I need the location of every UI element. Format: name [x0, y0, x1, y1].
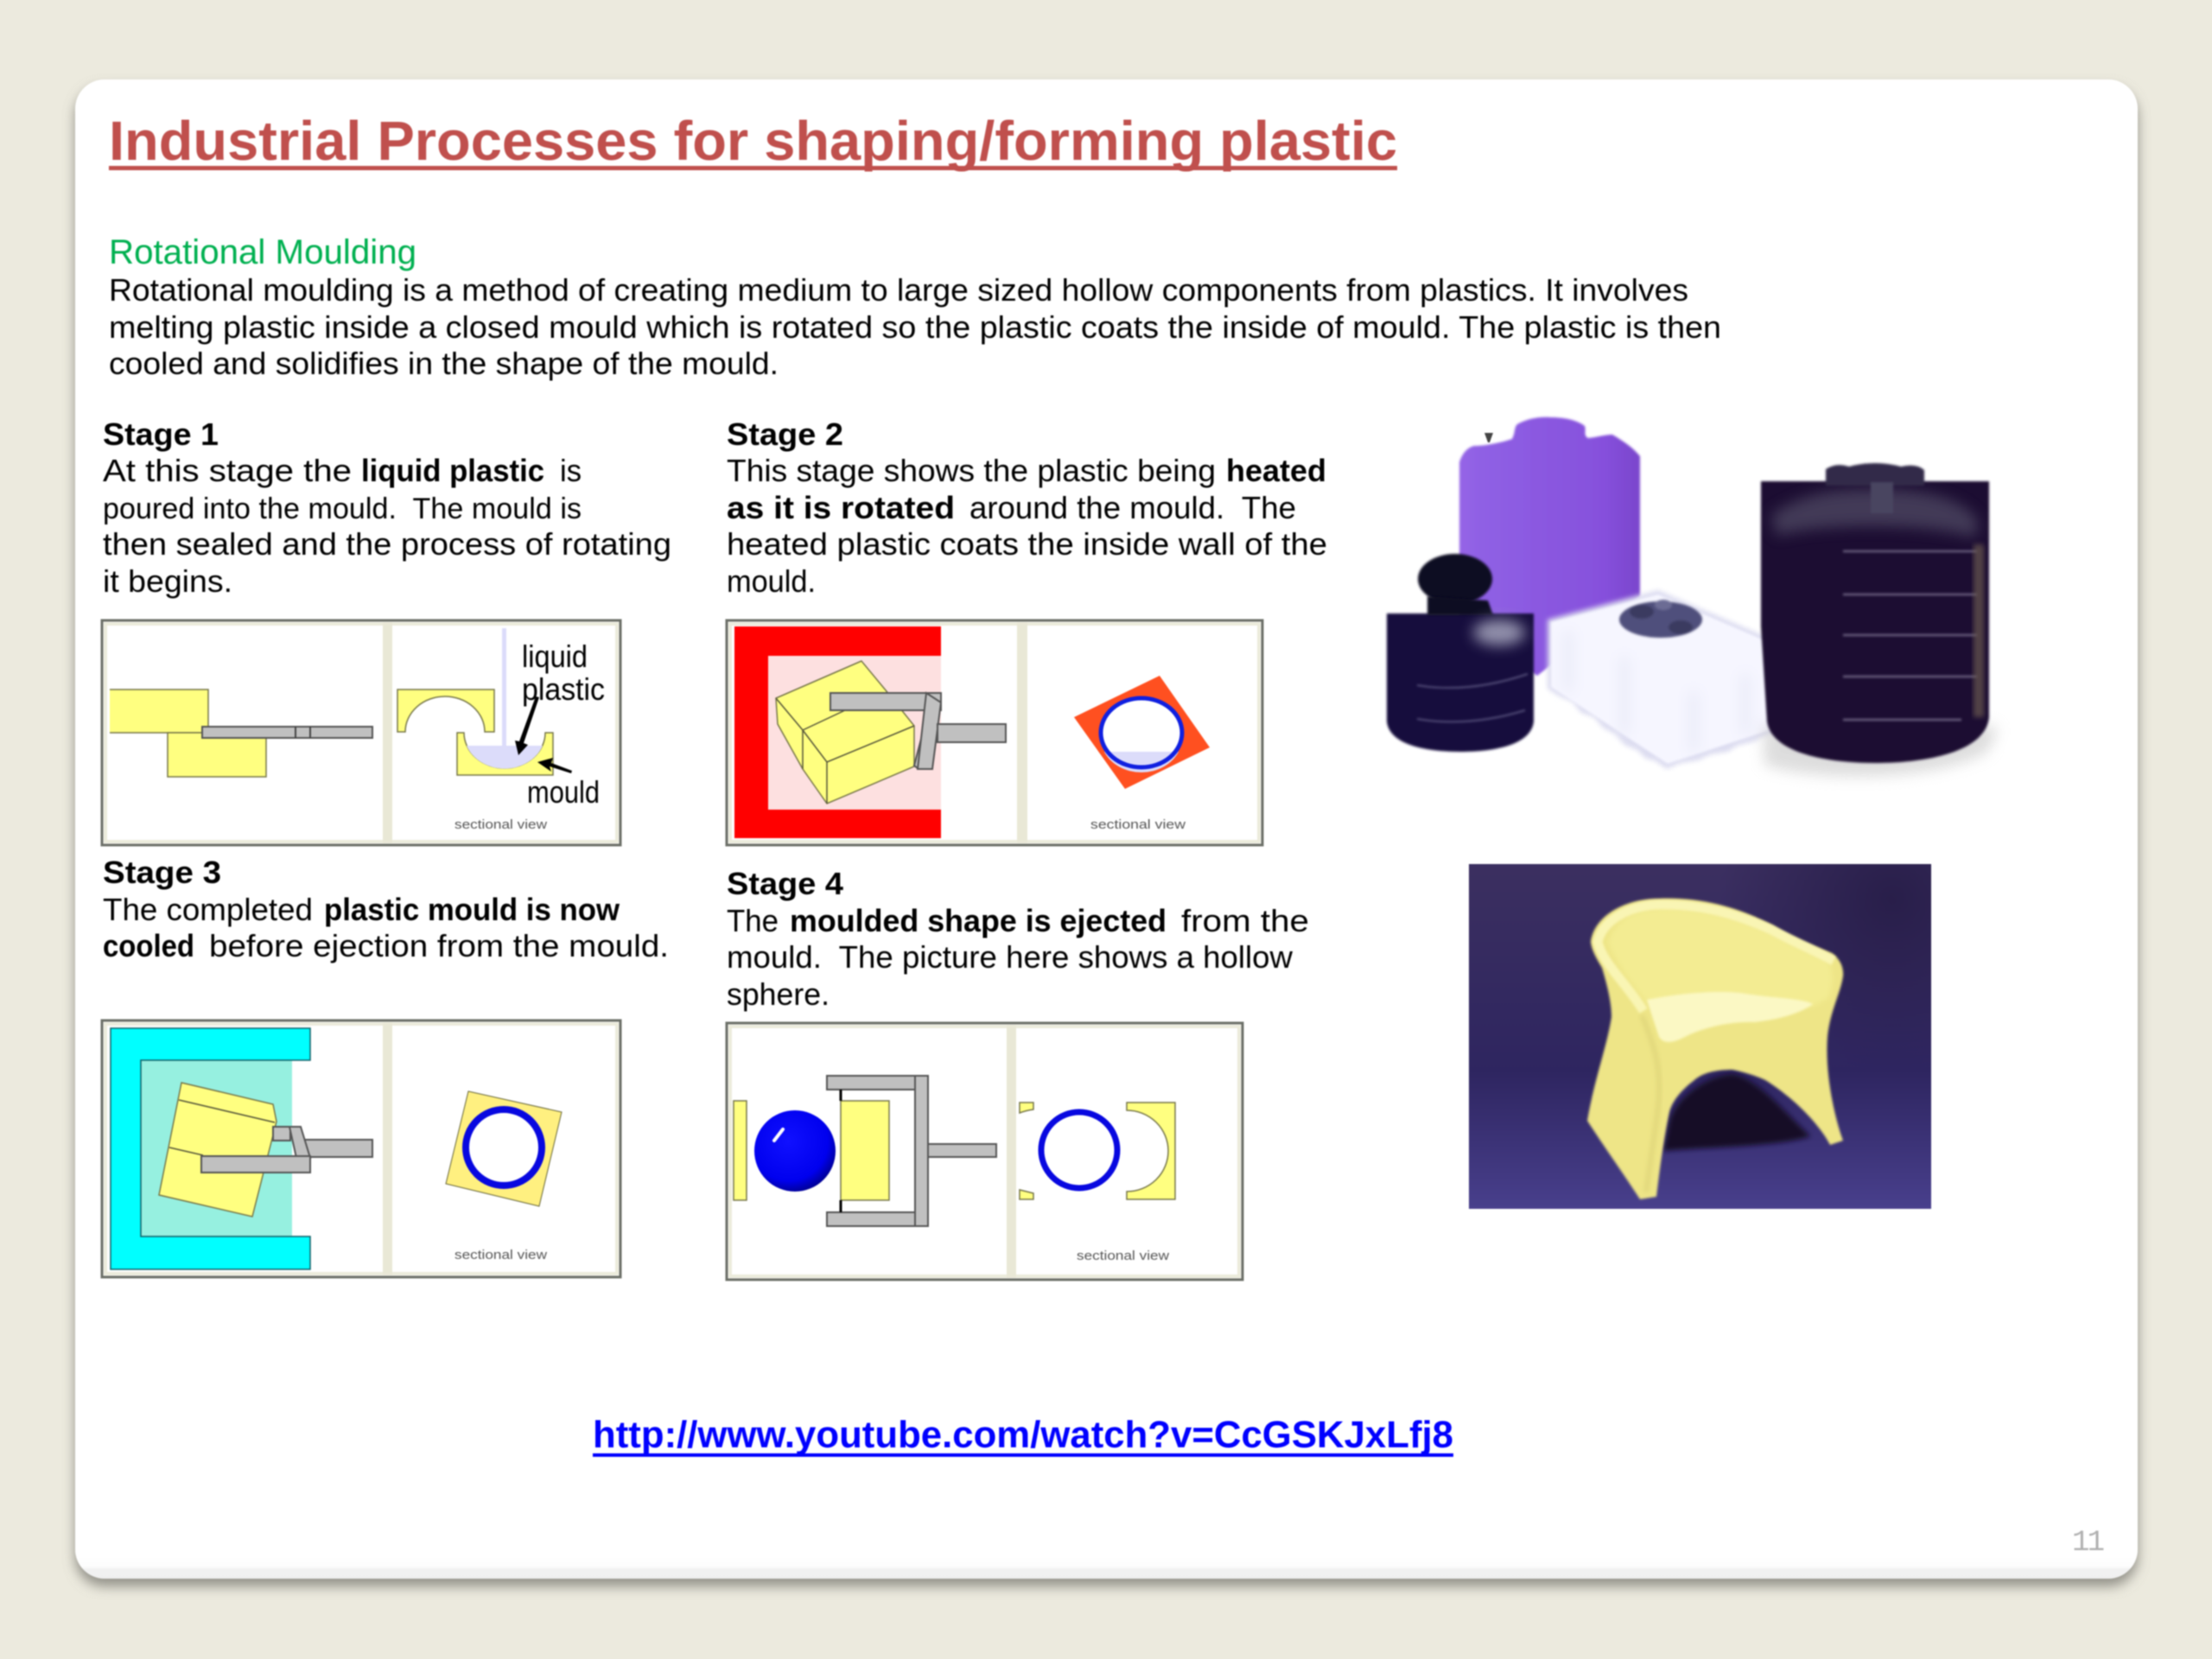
arrow to mould	[537, 758, 572, 773]
stage 4 text: The	[727, 903, 779, 938]
stage 1 text: At this stage the	[103, 453, 352, 488]
icon: hollow blue sphere	[754, 1110, 836, 1192]
stage 1 text: poured into the mould. The mould is	[103, 493, 582, 525]
intro paragraph: melting plastic inside a closed mould which is rotated so the plastic coats the inside of mould. The plastic is then	[109, 309, 1721, 345]
stage 2 diagram	[727, 620, 1262, 845]
stage 3 diagram	[102, 1020, 620, 1277]
tank lid	[1619, 600, 1702, 638]
stage 3 text: The completed	[103, 892, 313, 927]
stage 3 text	[103, 855, 669, 963]
stage 2 text: around the mould. The	[969, 490, 1296, 525]
stage 2 text: Stage 2	[727, 416, 843, 452]
stage 1 text: Stage 1	[103, 416, 219, 452]
stage 4 text: sphere.	[727, 976, 830, 1012]
photo: moulded yellow chair	[1469, 864, 1931, 1209]
stage 1 text: it begins.	[103, 563, 232, 599]
stage 4 text: Stage 4	[727, 866, 843, 901]
stage 4 text: from the	[1181, 903, 1309, 938]
stage 3 text: before ejection from the mould.	[209, 928, 669, 963]
label: liquid plastic: plastic	[522, 671, 605, 707]
stage 1 text: then sealed and the process of rotating	[103, 526, 671, 562]
stage 4 text	[727, 866, 1309, 1012]
sectional view caption: sectional view	[454, 1248, 547, 1262]
stage 4 diagram	[727, 1023, 1243, 1280]
section heading: Rotational Moulding: Rotational Moulding	[109, 233, 416, 271]
label: liquid plastic: liquid	[522, 639, 588, 674]
stage 1 text: is	[560, 453, 582, 488]
stage 4 text: mould. The picture here shows a hollow	[727, 939, 1294, 975]
sectional view caption: sectional view	[454, 817, 547, 832]
stage 2 text: heated	[1226, 453, 1326, 488]
large dark tank	[1761, 463, 1996, 777]
title: Industrial Processes for shaping/forming plastic	[109, 110, 1397, 172]
video link: http://www.youtube.com/watch?v=CcGSKJxLfj8	[593, 1414, 1453, 1456]
intro paragraph: cooled and solidifies in the shape of the mould.	[109, 346, 779, 381]
arrow to liquid plastic	[515, 696, 539, 755]
stage 3 text: cooled	[103, 928, 194, 963]
stage 4 text: moulded shape is ejected	[790, 903, 1166, 938]
small dark tank	[1387, 554, 1534, 752]
white square tank	[1548, 590, 1786, 769]
intro paragraph: Rotational moulding is a method of creating medium to large sized hollow components from plastics. It involves	[109, 272, 1688, 308]
stage 2 text: as it is rotated	[727, 490, 955, 525]
stage 1 text	[103, 416, 671, 599]
stage 2 text	[727, 416, 1327, 599]
photo: rotationally moulded tanks	[1387, 417, 1996, 777]
sectional view caption: sectional view	[1090, 817, 1185, 832]
stage 1 diagram	[102, 620, 620, 845]
stage 2 text: heated plastic coats the inside wall of the	[727, 526, 1327, 562]
stage 2 text: mould.	[727, 563, 816, 599]
page number: 11	[2072, 1527, 2105, 1560]
label: mould: mould	[527, 774, 600, 810]
stage 1 text: liquid plastic	[361, 453, 544, 488]
intro paragraph	[109, 272, 1721, 381]
stage 3 text: plastic mould is now	[324, 892, 620, 927]
stage 3 text: Stage 3	[103, 855, 221, 890]
sectional view caption: sectional view	[1077, 1249, 1169, 1263]
label: liquid plastic	[522, 639, 605, 707]
stage 2 text: This stage shows the plastic being	[727, 453, 1216, 488]
